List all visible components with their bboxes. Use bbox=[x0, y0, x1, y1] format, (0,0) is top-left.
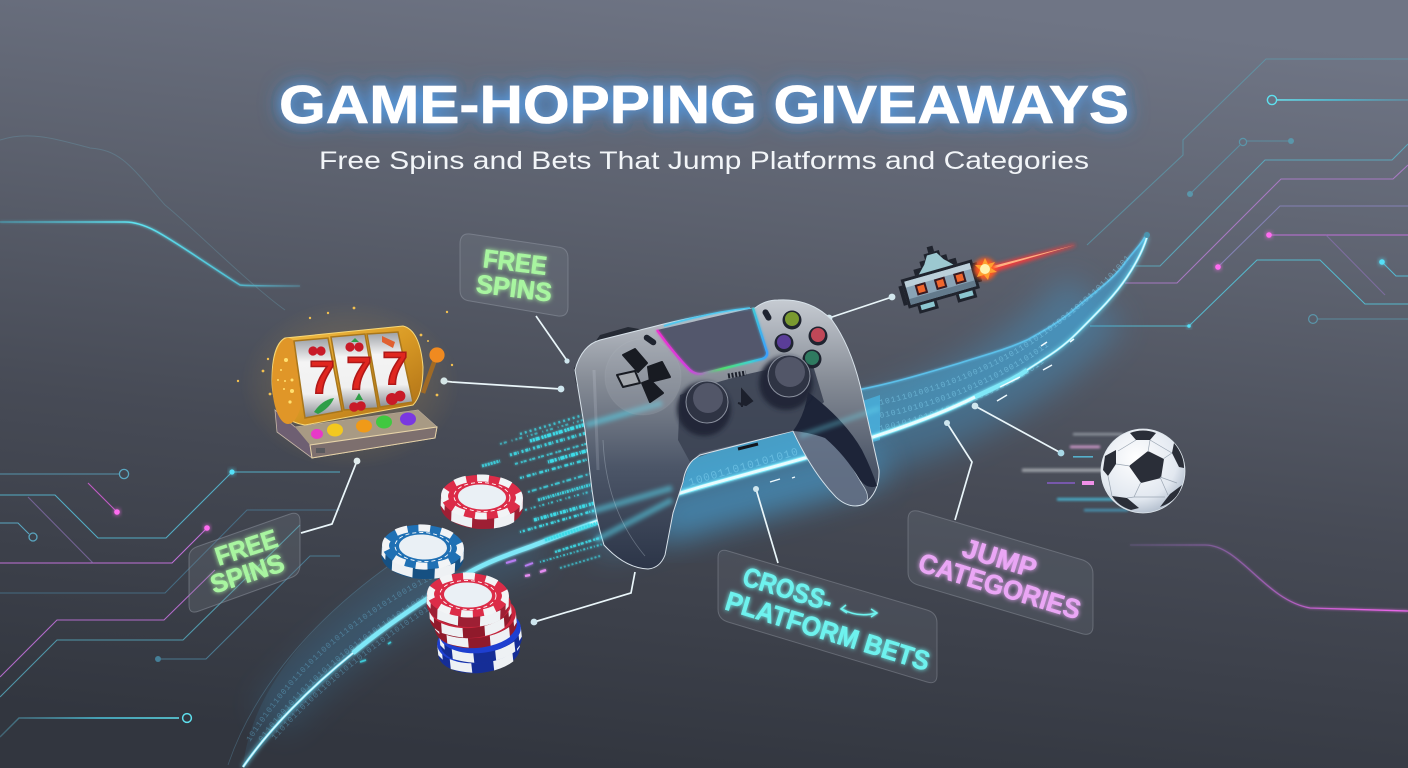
right grip glass lobe bbox=[793, 420, 868, 506]
circuit lines: lower left bbox=[0, 469, 340, 737]
shoulders bbox=[574, 327, 645, 388]
slot machine bbox=[237, 300, 460, 470]
label: free spins left: SPINS bbox=[206, 547, 288, 599]
game controller bbox=[574, 300, 880, 569]
buttons bbox=[311, 429, 323, 439]
binary digits right: 100101101011010011010101101001101011 bbox=[880, 360, 1044, 431]
label: cross-platform bets: PLATFORM BETS bbox=[722, 586, 933, 677]
label: free spins left bbox=[189, 513, 300, 612]
motion streaks bbox=[1022, 433, 1128, 511]
label: jump categories: JUMP bbox=[959, 533, 1040, 584]
subtitle: Free Spins and Bets That Jump Platforms and Categories bbox=[319, 147, 1089, 175]
sparkles bbox=[237, 307, 453, 396]
touchpad bbox=[657, 308, 767, 374]
binary digits right: 01011010110010110101101001101011010110100110 bbox=[880, 342, 1048, 418]
lower slot bbox=[738, 444, 758, 449]
label: jump categories bbox=[908, 511, 1093, 634]
label: free spins top: SPINS bbox=[475, 269, 554, 308]
lever bbox=[423, 357, 436, 393]
right grip dark band bbox=[793, 392, 877, 487]
pixel particles bbox=[360, 413, 625, 662]
face buttons bbox=[782, 310, 802, 330]
circuit lines: upper right bbox=[1087, 59, 1408, 328]
gold housing bbox=[272, 326, 423, 425]
label: free spins top: FREE bbox=[482, 243, 549, 281]
glass reflections and data through left grip bbox=[586, 370, 672, 556]
binary digits right: 1000110101010101 bbox=[688, 448, 798, 486]
sevens: 7 bbox=[309, 351, 335, 403]
connector lines bbox=[301, 294, 1064, 625]
binary digits left bbox=[246, 578, 432, 742]
option buttons bbox=[643, 334, 657, 346]
label: cross-platform bets bbox=[718, 550, 937, 683]
laser beam bbox=[985, 244, 1075, 274]
poker chips bbox=[380, 474, 524, 677]
body bbox=[575, 300, 879, 569]
speaker and logo bbox=[728, 373, 746, 376]
thumbsticks bbox=[677, 382, 731, 436]
fruit bbox=[308, 342, 405, 412]
sevens: 7 bbox=[346, 347, 372, 399]
sevens: 7 bbox=[382, 342, 408, 394]
binary digits left: 01101001011011010110100110101101011001011011 bbox=[258, 592, 427, 740]
cap glints bbox=[277, 358, 294, 404]
label: free spins top bbox=[460, 234, 568, 316]
d-pad bbox=[617, 349, 670, 402]
icon: double arrow bbox=[841, 605, 877, 617]
binary digits left: 1101011010011010101101011011010110101100101 bbox=[272, 606, 428, 740]
label: jump categories: CATEGORIES bbox=[915, 547, 1084, 625]
d-pad well bbox=[605, 339, 681, 415]
title: GAME-HOPPING GIVEAWAYS bbox=[279, 75, 1129, 135]
label: free spins left: FREE bbox=[211, 523, 281, 572]
retro pixel ship bbox=[890, 235, 1075, 317]
reels bbox=[294, 338, 342, 418]
base bbox=[275, 410, 437, 458]
binary digits right: 1011101001101011001011010110101101001101011011010011 bbox=[880, 256, 1130, 405]
muzzle flash bbox=[974, 258, 996, 280]
soccer ball bbox=[1022, 429, 1185, 513]
sevens bbox=[309, 342, 408, 403]
binary digits right bbox=[688, 256, 1130, 486]
glowing line bbox=[243, 237, 1147, 767]
binary digits left: 1011010110010110101100101101101010110010110110 bbox=[246, 578, 432, 742]
label: cross-platform bets: CROSS- bbox=[739, 562, 836, 617]
circuit lines: upper left bbox=[0, 136, 300, 310]
circuit line: lower right pink bbox=[1130, 545, 1408, 611]
center panel bbox=[678, 362, 824, 462]
